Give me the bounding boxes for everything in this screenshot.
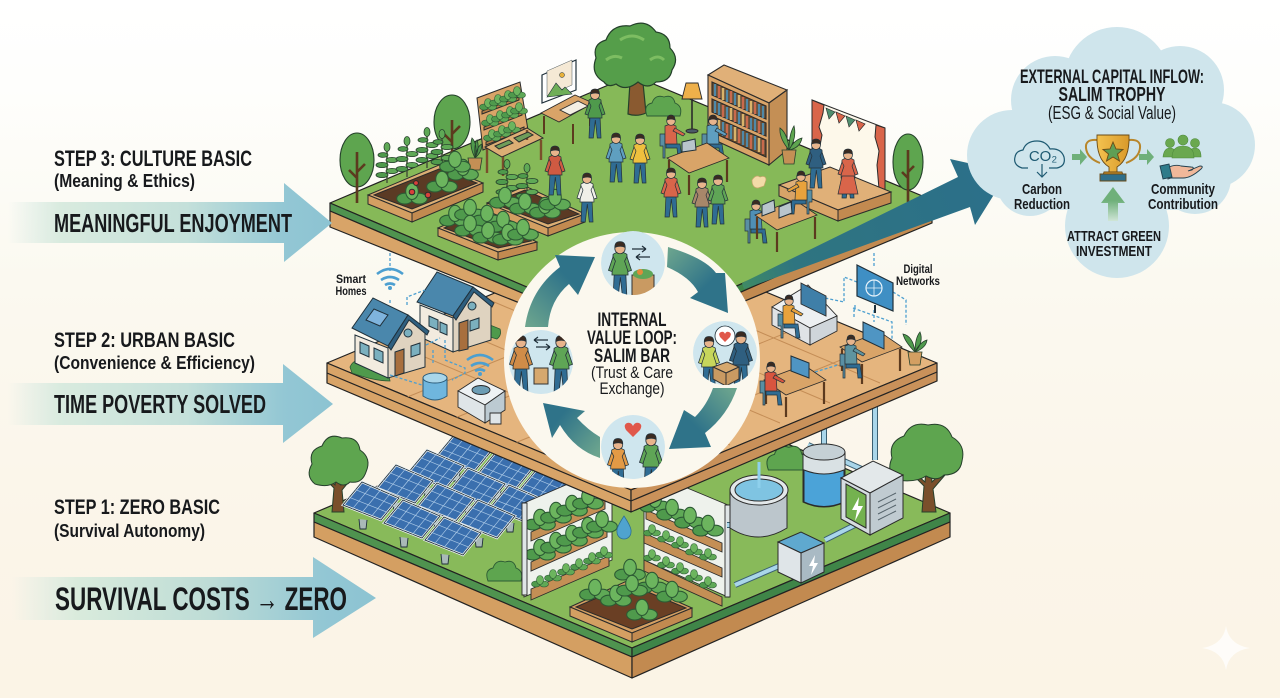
arrow: survival costs to zero: SURVIVAL COSTS → ZERO [55, 581, 347, 617]
bush behind tank [767, 446, 809, 470]
solar panel array [343, 434, 574, 564]
cloud heading: (ESG & Social Value) [1048, 103, 1176, 123]
picture board [542, 60, 576, 103]
smart homes label: Homes [336, 284, 367, 298]
digital networks label: Networks [896, 274, 940, 288]
potted plant [780, 126, 802, 164]
digital networks label [896, 262, 940, 288]
smart homes label [336, 272, 367, 298]
big arrow: capital flow to trophy [742, 159, 1008, 289]
community contribution label: Community [1151, 181, 1216, 198]
digital network links [815, 253, 906, 372]
loop title: INTERNAL [598, 310, 667, 331]
loop title: SALIM BAR [594, 346, 670, 367]
community contribution label [1148, 181, 1218, 213]
loop title: VALUE LOOP: [587, 328, 677, 349]
platform: step 3 culture basic [330, 23, 932, 348]
house 2 [417, 272, 494, 352]
water cylinder [803, 444, 845, 507]
digital networks label: Digital [904, 262, 932, 276]
water drop [617, 516, 631, 539]
heading: STEP 1: ZERO BASIC [54, 496, 220, 519]
bookcase [708, 65, 787, 165]
house 1 [352, 298, 429, 378]
sparkle mark [1202, 626, 1250, 670]
office desk 2 [840, 322, 902, 384]
people: handshake pair [606, 133, 650, 183]
arrow: time poverty solved [8, 364, 333, 443]
loop title: Exchange) [600, 379, 664, 398]
tree: big oak [594, 23, 676, 115]
people: group chat [661, 168, 728, 227]
internal value loop [504, 231, 760, 490]
arrow: survival costs to zero [12, 557, 376, 638]
main monitor [857, 265, 893, 313]
attract green investment label [1067, 228, 1161, 260]
person: gardener with basket [545, 146, 565, 195]
community contribution label: Contribution [1148, 196, 1218, 213]
potted plant [903, 332, 927, 365]
icon: community in hand [1160, 135, 1202, 179]
arrow: meaningful enjoyment: MEANINGFUL ENJOYMENT [54, 208, 292, 238]
arrow: carbon to trophy [1072, 149, 1087, 165]
icon: giving with heart [601, 415, 665, 479]
arrow: time poverty solved: TIME POVERTY SOLVED [54, 389, 266, 419]
icon: CO2 cloud: CO₂ [1029, 148, 1057, 165]
heading: STEP 2: URBAN BASIC [54, 329, 235, 352]
attract green investment label: INVESTMENT [1076, 243, 1152, 260]
raised bed [570, 559, 692, 642]
wifi icons and data links [377, 253, 493, 385]
lamp [682, 83, 702, 133]
carbon reduction label: Reduction [1014, 196, 1070, 213]
rain tank [423, 373, 447, 400]
platform: step 1 zero basic [309, 378, 963, 678]
carbon reduction label: Carbon [1022, 181, 1062, 198]
tree: left tall [434, 95, 470, 166]
arrow: trophy to community [1139, 149, 1154, 165]
attract green investment label: ATTRACT GREEN [1067, 228, 1161, 245]
raised bed 1 [368, 128, 483, 222]
raised bed 2 [438, 199, 538, 260]
work table [541, 95, 593, 144]
stage [779, 100, 891, 221]
table meeting [660, 115, 729, 195]
subheading: (Convenience & Efficiency) [54, 353, 255, 373]
platform: step 2 urban basic [327, 236, 940, 512]
water tank [730, 462, 788, 537]
loop disc [504, 232, 760, 488]
icon: trophy [1086, 135, 1140, 181]
subheading: (Meaning & Ethics) [54, 171, 195, 191]
person: apron vendor [577, 173, 597, 222]
mid deck [327, 236, 937, 512]
cloud heading: SALIM TROPHY [1058, 84, 1166, 106]
person: actor [806, 139, 826, 188]
loop arrows [525, 247, 737, 458]
water pipes [727, 395, 875, 585]
potted shrub [468, 138, 482, 170]
office desk 1 [772, 283, 837, 345]
top deck [330, 75, 932, 348]
person: artist [585, 89, 605, 138]
tree left [309, 436, 368, 512]
cloud shape [967, 27, 1255, 278]
vertical farm right [640, 470, 730, 606]
heading: STEP 3: CULTURE BASIC [54, 146, 252, 171]
office desk 3 [760, 356, 826, 417]
bush by oak [646, 96, 681, 116]
loop title [587, 310, 677, 398]
step 1 labels [54, 496, 220, 541]
base deck [314, 378, 950, 678]
step 2 labels [54, 329, 255, 373]
loop title: (Trust & Care [591, 363, 673, 382]
icon: exchange with groceries [601, 231, 665, 298]
smart homes label: Smart [336, 272, 366, 286]
subheading: (Survival Autonomy) [54, 521, 205, 541]
tree: right small [893, 134, 923, 202]
cloud heading [1020, 67, 1204, 123]
icon: bag swap [509, 330, 573, 394]
leaf sketch [752, 176, 766, 188]
vertical farm left [522, 465, 617, 600]
arrow: green investment up [1101, 187, 1125, 221]
heat pump unit [458, 378, 505, 424]
planter rack [477, 82, 543, 176]
tree right [890, 424, 963, 512]
person: actress [838, 149, 858, 198]
bush by house [350, 325, 501, 381]
icon: CO2 cloud [1015, 141, 1064, 177]
icon: care package [693, 321, 757, 388]
bush [487, 561, 522, 581]
arrow: meaningful enjoyment [8, 183, 332, 262]
deck planks [407, 300, 880, 446]
table laptops [745, 171, 817, 252]
battery box [778, 532, 824, 583]
tree: left small [340, 133, 374, 203]
step 3 labels [54, 146, 252, 191]
panel: external capital cloud [967, 27, 1255, 278]
inverter cabinet [841, 461, 903, 535]
raised bed 3 [487, 160, 585, 236]
carbon reduction label [1014, 181, 1070, 213]
